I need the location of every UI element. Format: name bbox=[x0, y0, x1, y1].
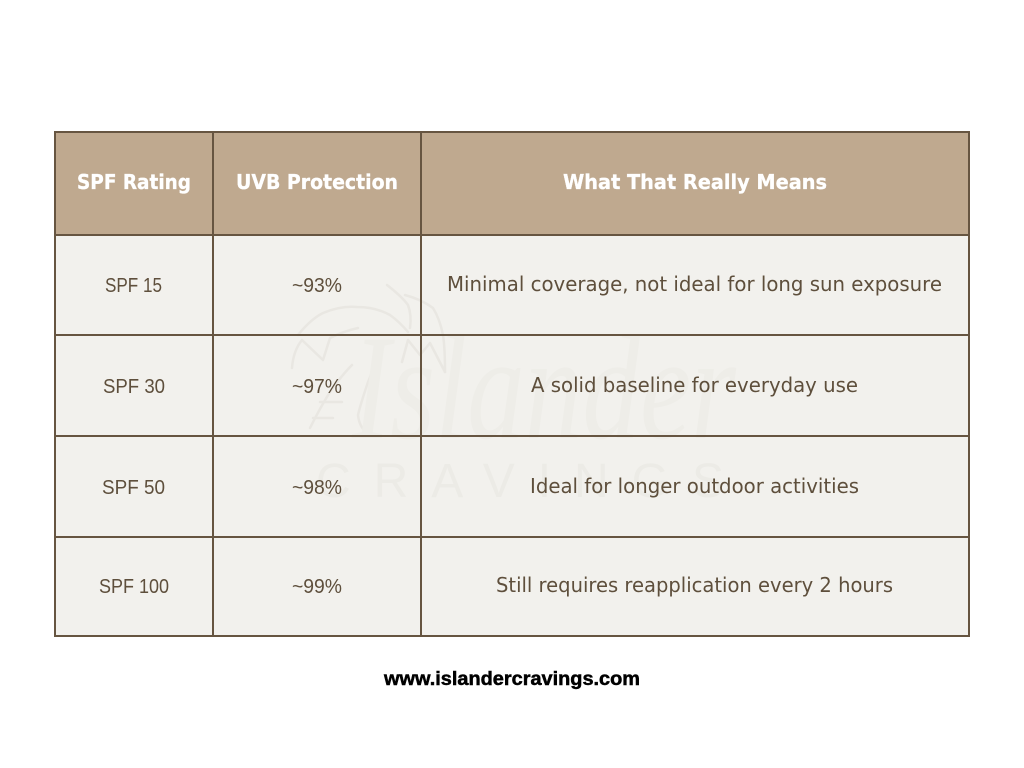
watermark script word: Islander bbox=[351, 305, 736, 471]
header: What That Really Means: What That Really Means bbox=[563, 170, 827, 194]
row: SPF 100: ~99% bbox=[292, 576, 342, 598]
row: SPF 15: Minimal coverage, not ideal for long sun exposure bbox=[447, 272, 942, 296]
table panel bbox=[55, 132, 969, 636]
row: SPF 50: SPF 50 bbox=[102, 477, 165, 499]
footer website URL: www.islandercravings.com bbox=[383, 669, 640, 690]
row: SPF 30 bbox=[103, 373, 858, 398]
row: SPF 15 bbox=[105, 272, 942, 297]
row: SPF 100: SPF 100 bbox=[99, 576, 169, 598]
header row background bbox=[55, 132, 969, 235]
row: SPF 30: A solid baseline for everyday use bbox=[531, 373, 858, 397]
row: SPF 30: ~97% bbox=[292, 376, 342, 398]
row: SPF 30: SPF 30 bbox=[103, 376, 165, 398]
row: SPF 15: ~93% bbox=[292, 275, 342, 297]
watermark: Islander Cravings logo bbox=[292, 285, 736, 508]
row: SPF 15: SPF 15 bbox=[105, 275, 162, 297]
header: SPF Rating: SPF Rating bbox=[77, 170, 191, 194]
table grid lines bbox=[55, 132, 969, 636]
row: SPF 100: Still requires reapplication every 2 hours bbox=[496, 573, 893, 597]
row: SPF 50 bbox=[102, 474, 859, 499]
watermark spaced word: CRAVINGS bbox=[316, 455, 724, 508]
header: UVB Protection: UVB Protection bbox=[236, 170, 398, 194]
body rows background bbox=[55, 235, 969, 636]
row: SPF 50: ~98% bbox=[292, 477, 342, 499]
watermark palm icon bbox=[292, 285, 445, 435]
row: SPF 50: Ideal for longer outdoor activities bbox=[530, 474, 859, 498]
row: SPF 100 bbox=[99, 573, 893, 598]
